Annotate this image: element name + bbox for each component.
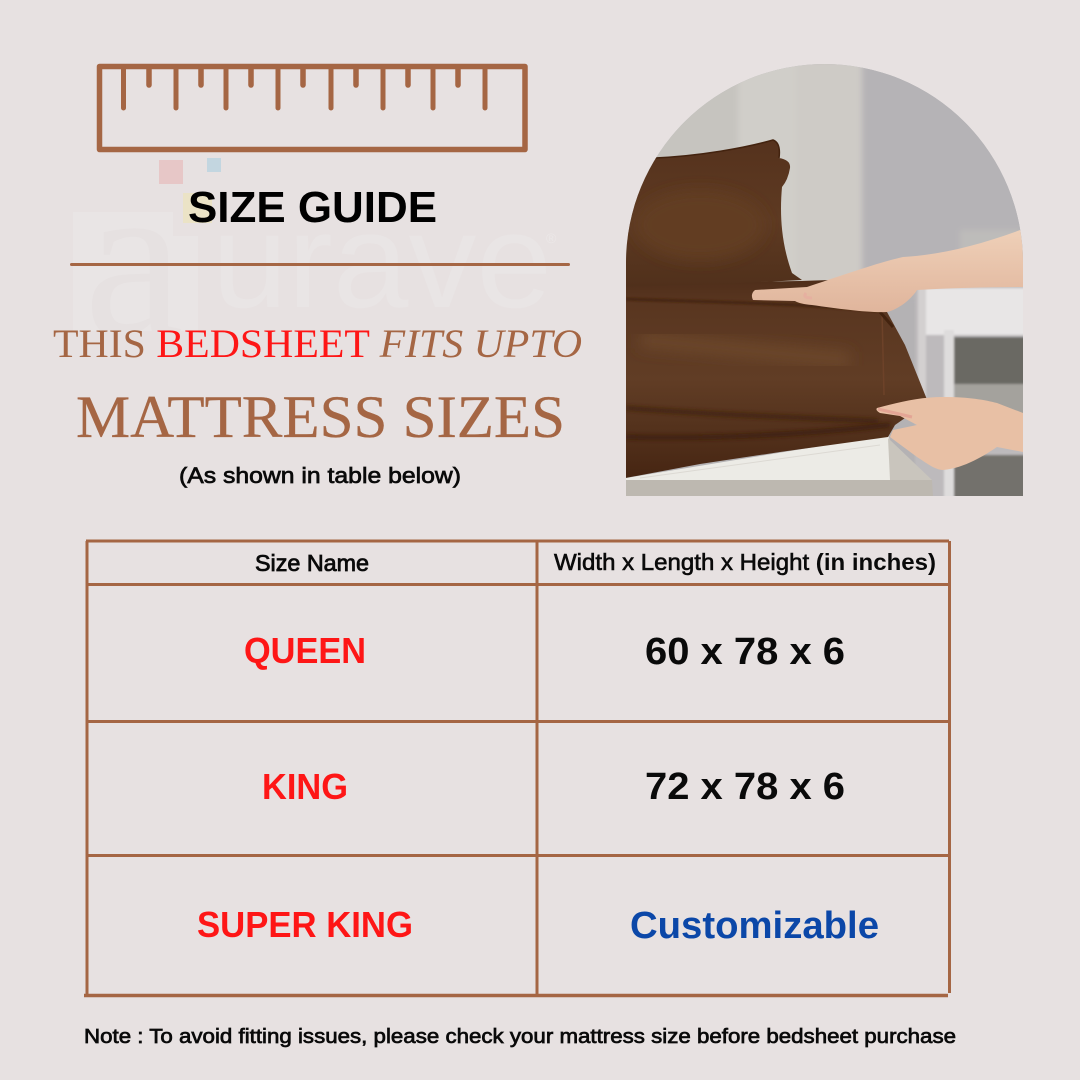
hand lower [876, 397, 1023, 470]
row: queen: 60 x 78 x 6 [645, 631, 845, 673]
fitted sheet [620, 280, 928, 479]
row: king: 72 x 78 x 6 [645, 766, 845, 808]
decorative logo squares [159, 158, 221, 223]
icon: ruler [100, 66, 525, 150]
pillow [620, 140, 802, 287]
wall [620, 60, 1030, 500]
row: queen [244, 630, 845, 673]
row: king [262, 766, 845, 808]
divider line [70, 263, 570, 266]
photo: hands fitting brown bedsheet [620, 60, 1030, 500]
heading: mattress sizes: MATTRESS SIZES [76, 384, 565, 450]
furniture [915, 285, 1027, 500]
watermark: aurave logo: ® [546, 230, 557, 246]
table grid [84, 541, 950, 996]
title: size guide: SIZE GUIDE [188, 183, 437, 232]
row: king: KING [262, 766, 348, 807]
table [84, 541, 950, 996]
footnote: Note : To avoid fitting issues, please check your mattress size before bedsheet purchase [84, 1026, 956, 1048]
heading: this bedsheet fits upto: THIS BEDSHEET FITS UPTO [53, 321, 582, 366]
watermark: aurave logo: urave [212, 185, 552, 336]
row: super king: Customizable [630, 905, 879, 947]
hand upper [752, 229, 1023, 312]
row: super king: SUPER KING [197, 904, 413, 945]
row: super king [197, 904, 879, 947]
header: dimensions: Width x Length x Height (in inches) [554, 549, 936, 575]
header: size name: Size Name [255, 550, 369, 576]
row: queen: QUEEN [244, 630, 366, 671]
watermark: aurave logo [73, 133, 557, 383]
subheading: (As shown in table below) [179, 463, 461, 488]
mattress and base [626, 436, 890, 480]
watermark: aurave logo: a [84, 133, 184, 383]
